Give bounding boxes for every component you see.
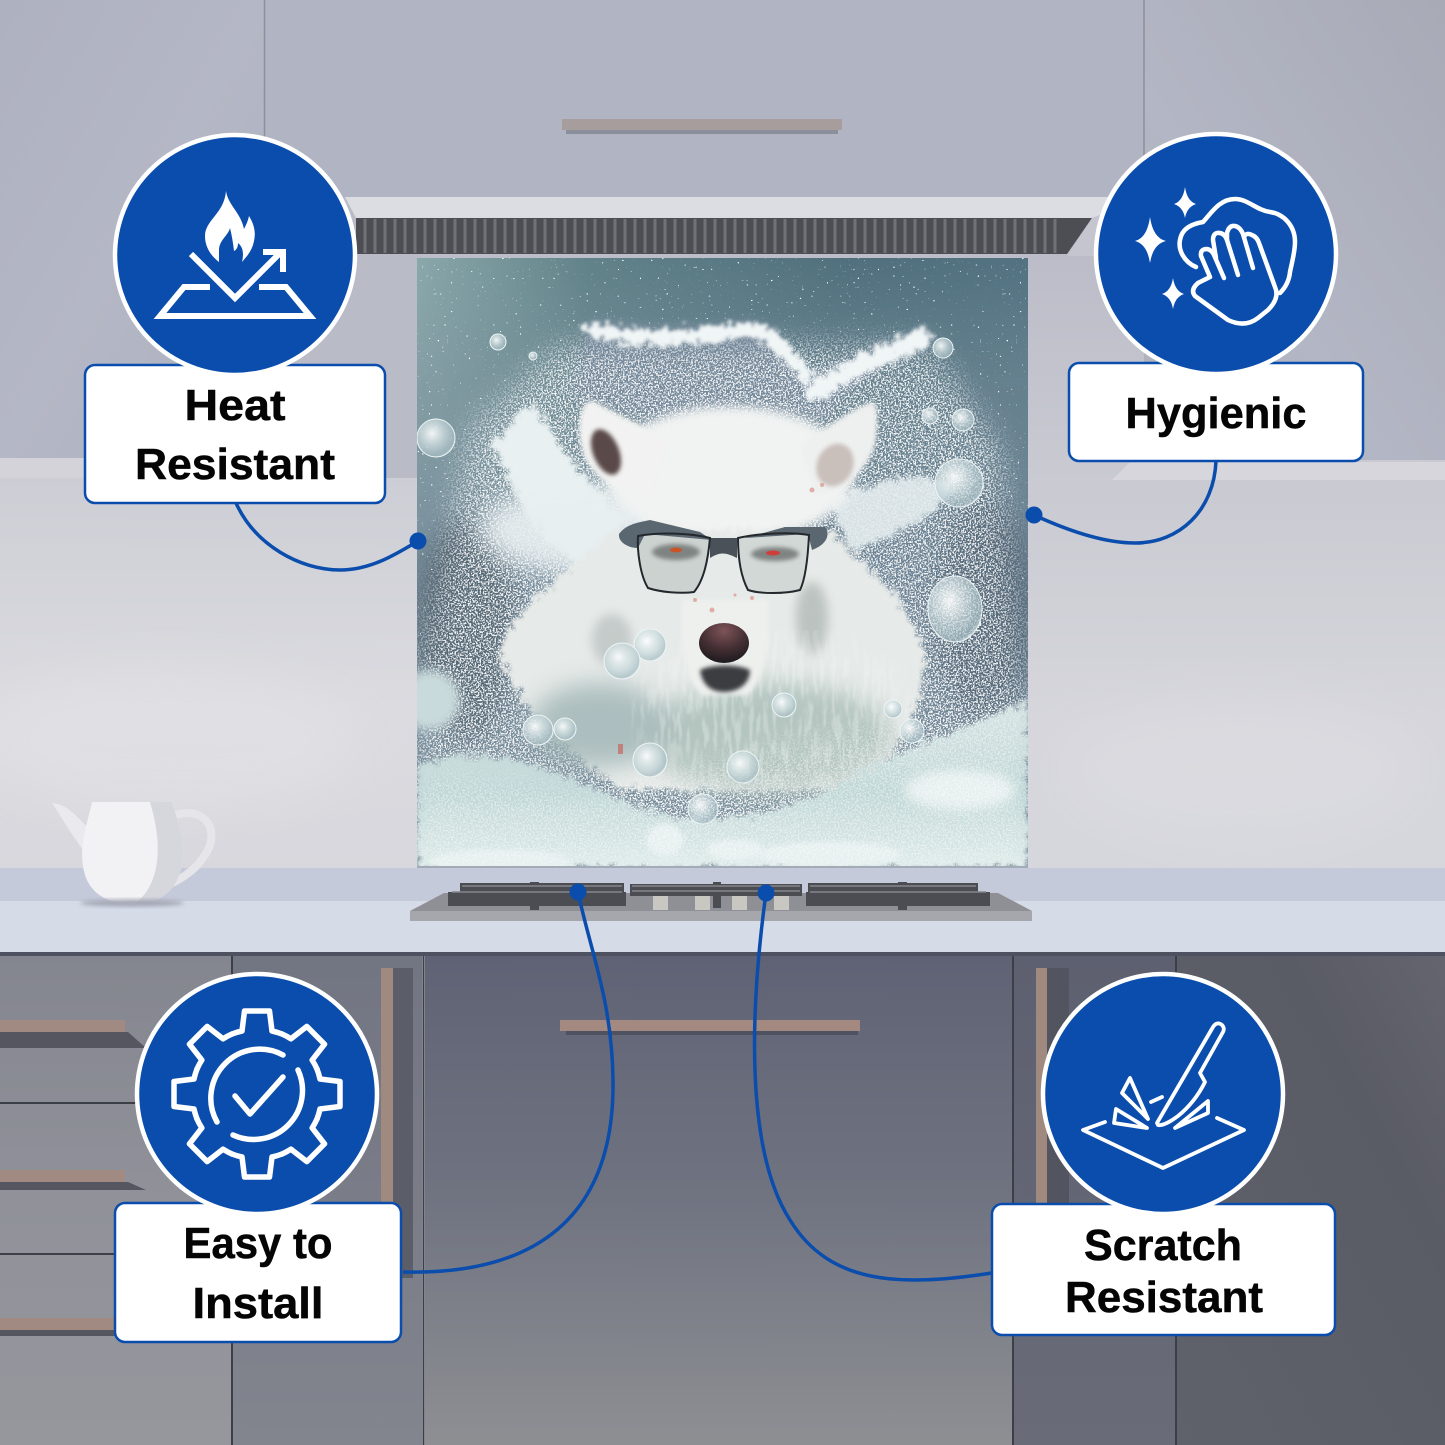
- heading: resistant: Resistant: [135, 440, 335, 489]
- vertical handle right: [1036, 968, 1069, 1208]
- white fur mist: [480, 484, 720, 576]
- nose: [699, 623, 749, 663]
- heading: scratch: Scratch: [1084, 1221, 1242, 1270]
- lower left door: [233, 953, 422, 1445]
- ice splash hat: [572, 318, 931, 430]
- brow left: [619, 520, 712, 548]
- connector: scratch resistant: [755, 884, 992, 1280]
- lower right door: [1014, 953, 1175, 1445]
- badge circle: [1043, 974, 1283, 1214]
- connector: heat resistant: [236, 503, 426, 570]
- grate highlights: [452, 886, 986, 892]
- red fur marks: [618, 483, 824, 754]
- cabinet soft shading: [264, 197, 422, 478]
- snout: [690, 654, 761, 697]
- upper wall behind hood: [0, 190, 1445, 880]
- panel: wolf splashback artwork: [400, 258, 1035, 874]
- connector: easy to install: [403, 884, 613, 1272]
- lower far right door: [1177, 953, 1445, 1445]
- fur body: [498, 530, 925, 790]
- heading: hygienic: Hygienic: [1126, 389, 1306, 438]
- upper cabinet seams: [264, 0, 1144, 197]
- fur strands: [630, 630, 910, 790]
- brow right: [745, 527, 827, 550]
- icon: wiping hand and sparkles: [1135, 187, 1295, 324]
- feature: hygienic: [1069, 134, 1363, 461]
- snow bank left: [400, 670, 460, 730]
- icon: knife scratching surface: [1083, 1023, 1244, 1168]
- label box: [1069, 363, 1363, 461]
- label box: [992, 1204, 1335, 1335]
- label box: [115, 1203, 401, 1342]
- badge circle: [115, 135, 355, 375]
- lower left drawers: [0, 953, 231, 1445]
- centre cabinet handle: [560, 1020, 860, 1035]
- vent slats: [365, 219, 1055, 253]
- right shelf strip: [1112, 462, 1445, 480]
- badge circle: [1096, 134, 1336, 374]
- upper cabinet right: [1144, 0, 1445, 460]
- gear outline: [174, 1011, 340, 1177]
- right eye: [766, 550, 780, 556]
- connector: hygienic: [1026, 461, 1216, 543]
- sparse droplets: [417, 258, 1028, 868]
- head top fur: [605, 406, 855, 542]
- left dark spray: [415, 520, 515, 740]
- fur shade side left: [592, 614, 632, 666]
- extractor vent: [356, 218, 1092, 254]
- wall right of panel: [1028, 250, 1445, 880]
- inner ring arcs: [211, 1049, 302, 1139]
- countertop front: [0, 901, 1445, 953]
- vertical handle left: [381, 968, 413, 1278]
- burner grate left: [448, 882, 626, 910]
- upper cabinet left: [0, 0, 264, 458]
- fine spray overlay: [417, 700, 1028, 868]
- speckle spray field: [417, 345, 1028, 868]
- lens fur left: [638, 534, 710, 593]
- splash wave left: [486, 405, 630, 565]
- kettle: [52, 802, 212, 906]
- fur shade right: [796, 582, 828, 654]
- splash wave right: [830, 477, 955, 550]
- left drawer handles: [0, 1020, 146, 1336]
- right ear: [819, 400, 880, 482]
- heading: easy to: Easy to: [184, 1219, 332, 1268]
- badge circle: [137, 974, 377, 1214]
- mouth: [700, 666, 750, 692]
- eye shadows: [652, 544, 799, 561]
- feature: heat resistant: [85, 135, 385, 503]
- right frame: [738, 533, 809, 593]
- heading: install: Install: [192, 1279, 324, 1328]
- left inner ear: [588, 426, 624, 478]
- glasses: [619, 520, 827, 593]
- hood bottom edge: [1067, 197, 1145, 256]
- background mist gradient: [417, 258, 1028, 868]
- label box: [85, 365, 385, 503]
- wall highlight left: [0, 670, 360, 810]
- bridge: [710, 538, 737, 558]
- hob front edge: [410, 911, 1032, 921]
- snow clouds bottom: [430, 770, 1015, 874]
- left frame: [638, 534, 710, 593]
- wall highlight right: [1060, 700, 1420, 840]
- lower chest fur: [645, 682, 895, 794]
- upper cabinet handle: [562, 119, 842, 134]
- check mark: [235, 1077, 283, 1114]
- right dark spray: [935, 500, 1035, 720]
- burner grate right: [806, 882, 990, 910]
- bubbles: [417, 334, 983, 824]
- left shelf strip: [0, 458, 88, 478]
- icon: gear with check mark: [174, 1011, 340, 1177]
- artwork background: [417, 258, 1028, 868]
- hob base plate: [410, 893, 1032, 921]
- snow mound bottom: [417, 700, 1028, 868]
- feature: scratch resistant: [992, 974, 1335, 1335]
- feature: easy to install: [115, 974, 401, 1342]
- counter shadow line: [0, 952, 1445, 956]
- countertop back: [0, 868, 1445, 906]
- panel edge shadow: [417, 866, 1028, 868]
- lower centre door: [425, 953, 1012, 1445]
- hob: [410, 882, 1032, 921]
- icon: flame on surface with arrow: [160, 191, 310, 316]
- extractor hood band: [345, 197, 1145, 218]
- cabinet seams: [0, 953, 1176, 1445]
- upper cabinet centre: [264, 0, 1144, 197]
- right inner ear: [814, 442, 856, 488]
- left ear: [576, 398, 648, 484]
- splash hat rim: [590, 328, 922, 392]
- left eye: [670, 548, 682, 552]
- heading: heat: Heat: [184, 381, 286, 430]
- burner grate centre: [630, 882, 802, 908]
- lens fur right: [738, 533, 809, 593]
- control knobs: [653, 896, 789, 910]
- fur shade left: [530, 683, 670, 767]
- heading: resistant: Resistant: [1065, 1273, 1263, 1322]
